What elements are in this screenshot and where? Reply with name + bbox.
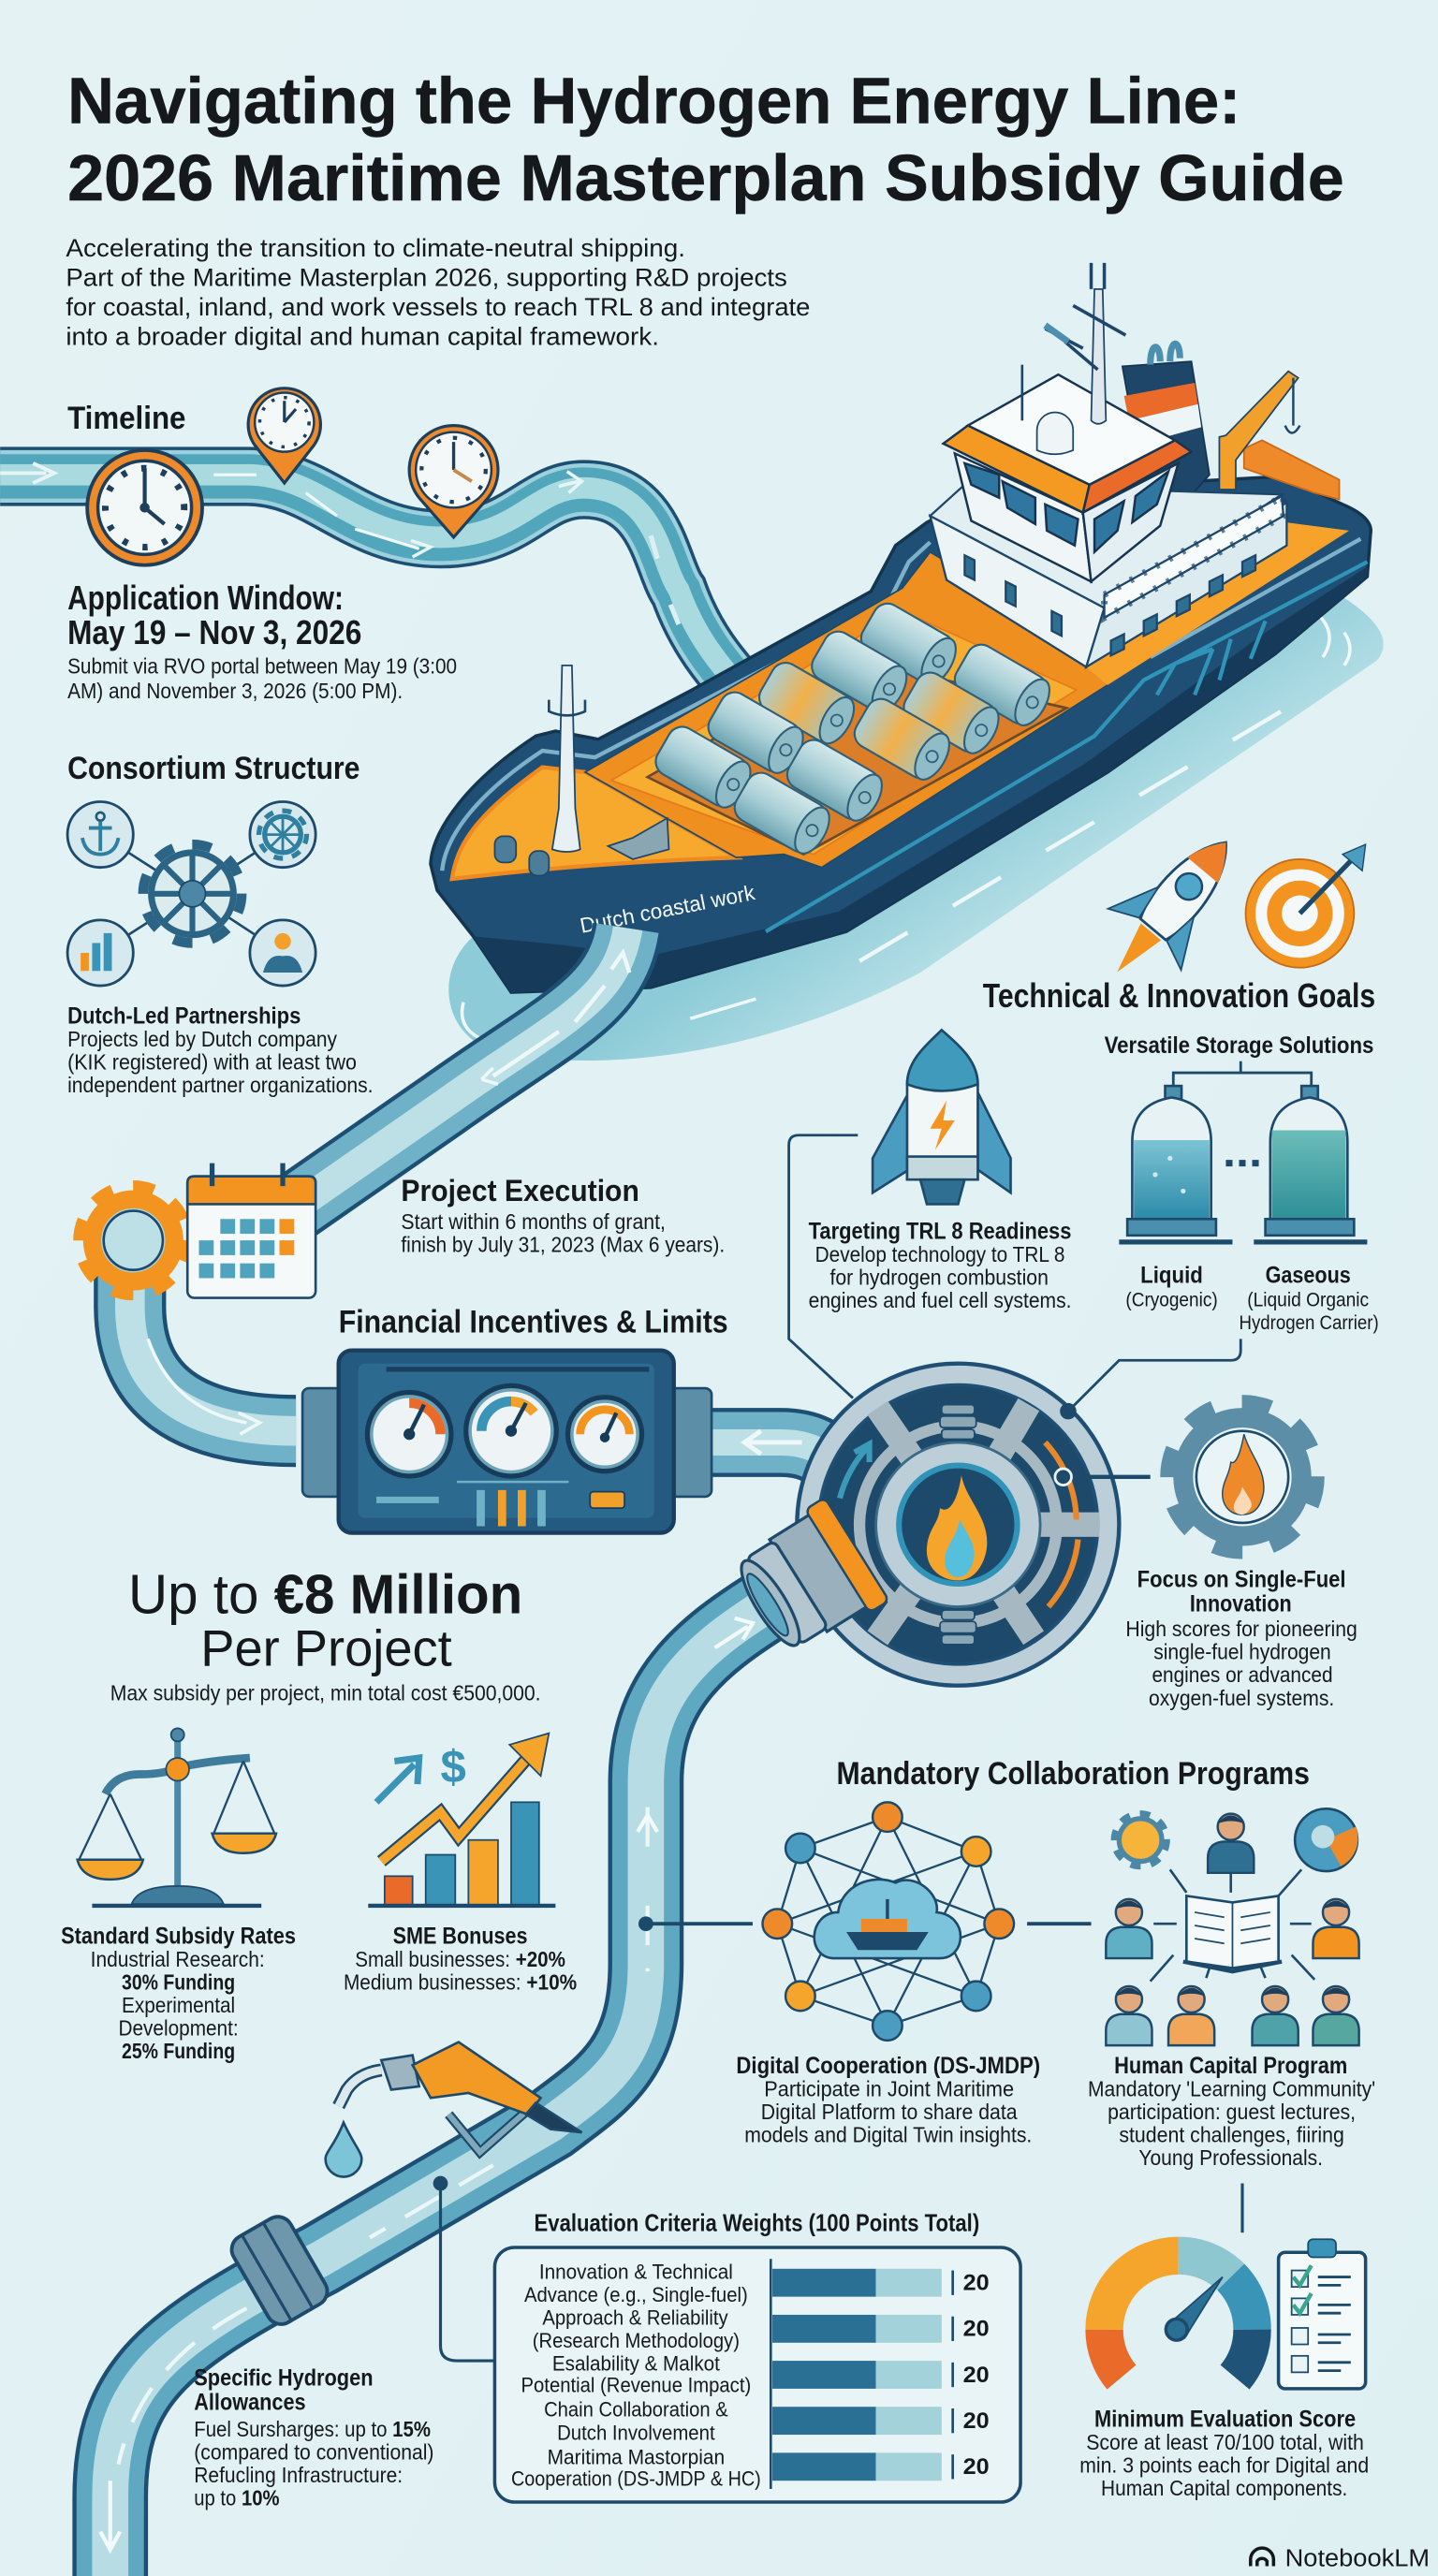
icon: large clock xyxy=(87,450,202,565)
project execution: finish by July 31, 2023 (Max 6 years). xyxy=(401,1232,725,1256)
hull stripes xyxy=(766,562,1367,931)
intro text xyxy=(66,233,810,351)
icon: clock pin two xyxy=(409,426,498,537)
digital network icon xyxy=(763,1802,1014,2041)
storage labels: Hydrogen Carrier) xyxy=(1239,1312,1379,1334)
hull lower band xyxy=(474,567,1367,992)
row 1: Advance (e.g., Single-fuel) xyxy=(524,2283,748,2306)
main deck xyxy=(585,552,1118,868)
row 3: Esalability & Malkot xyxy=(552,2352,720,2376)
icon: rocket small xyxy=(1080,812,1262,1003)
icon: ship wheel xyxy=(143,844,242,943)
icon: small wheel xyxy=(250,801,315,868)
row 2: Approach & Reliability xyxy=(542,2305,728,2329)
leader: pipe to evaluation xyxy=(433,2176,494,2361)
hydrogen allowances text: Fuel Sursharges: up to 15% xyxy=(194,2417,431,2441)
leader: storage to hub xyxy=(1068,1339,1240,1412)
icon: flame gear xyxy=(1170,1405,1314,1549)
max subsidy stat xyxy=(110,1563,541,1705)
row 1 xyxy=(524,2260,990,2306)
project execution: Start within 6 months of grant, xyxy=(401,1209,666,1234)
hull name: Dutch coastal work xyxy=(578,880,757,938)
hub collar xyxy=(726,1498,889,1662)
title: Navigating the Hydrogen Energy Line: xyxy=(67,65,1240,138)
SME text: Small businesses: +20% xyxy=(355,1947,565,1971)
min score text: Human Capital components. xyxy=(1101,2476,1347,2500)
consortium diagram xyxy=(67,801,315,986)
pipe: control box to hub xyxy=(707,1431,838,1471)
mandatory heading: Mandatory Collaboration Programs xyxy=(836,1756,1310,1792)
min score text xyxy=(1079,2407,1369,2500)
max subsidy stat: Up to €8 Million xyxy=(128,1563,522,1626)
partnerships text xyxy=(67,1003,374,1097)
project execution: Project Execution xyxy=(401,1174,639,1208)
TRL text: for hydrogen combustion xyxy=(829,1265,1049,1289)
intro text: into a broader digital and human capital framework. xyxy=(66,322,659,351)
min score text: Score at least 70/100 total, with xyxy=(1086,2430,1364,2454)
storage labels: Gaseous xyxy=(1266,1264,1351,1289)
storage dots xyxy=(1225,1162,1259,1165)
gauge 3 xyxy=(565,1395,644,1473)
icon: anchor xyxy=(67,801,133,868)
intro text: for coastal, inland, and work vessels to reach TRL 8 and integrate xyxy=(66,292,810,321)
icon: checklist clipboard xyxy=(1279,2239,1366,2389)
people group xyxy=(1106,1899,1359,2045)
connector: learning to score xyxy=(1241,2184,1243,2232)
icon: hub flame xyxy=(927,1475,987,1580)
TRL text xyxy=(809,1219,1071,1312)
hub dots xyxy=(1060,1403,1077,1419)
max subsidy stat: Per Project xyxy=(200,1620,452,1677)
intro text: Part of the Maritime Masterplan 2026, supporting R&D projects xyxy=(66,262,787,291)
timeline pipe xyxy=(0,463,764,714)
heading: storage: Versatile Storage Solutions xyxy=(1105,1033,1373,1059)
row 5: Maritima Mastorpian xyxy=(548,2446,725,2469)
subsidy rates text: Standard Subsidy Rates xyxy=(61,1924,296,1949)
digital cooperation text: Participate in Joint Maritime xyxy=(764,2077,1014,2101)
funnel xyxy=(1123,344,1210,522)
TRL text: Develop technology to TRL 8 xyxy=(815,1242,1064,1266)
title: 2026 Maritime Masterplan Subsidy Guide xyxy=(67,141,1344,214)
foremast xyxy=(549,666,585,852)
icon: person suit xyxy=(1208,1814,1254,1873)
single-fuel text: engines or advanced xyxy=(1152,1662,1333,1687)
project execution xyxy=(401,1174,725,1256)
deck rim xyxy=(611,611,1077,855)
human capital text: Human Capital Program xyxy=(1114,2054,1347,2079)
row 4: 20 xyxy=(963,2409,990,2434)
single-fuel text: Innovation xyxy=(1190,1592,1292,1617)
row 4: Dutch Involvement xyxy=(557,2421,715,2444)
icon: target xyxy=(1246,844,1366,968)
storage labels xyxy=(1125,1264,1379,1334)
row 4: Chain Collaboration & xyxy=(544,2398,728,2422)
icon: bars xyxy=(67,920,133,986)
icon: gear xyxy=(82,1190,184,1292)
pipe: ship to gear xyxy=(271,929,629,1224)
cargo tanks xyxy=(651,598,1057,860)
bridge cabin xyxy=(944,374,1192,581)
leader: pipe to network xyxy=(638,1916,753,1931)
subsidy rates text: Development: xyxy=(119,2016,239,2041)
bulwark rim xyxy=(442,539,1360,871)
icon: gaseous tank xyxy=(1254,1086,1367,1242)
hydrogen allowances text: (compared to conventional) xyxy=(194,2439,433,2464)
SME text: SME Bonuses xyxy=(393,1924,528,1949)
main pipe: hub to bottom xyxy=(100,1602,772,2576)
central hub xyxy=(797,1364,1119,1686)
storage labels: Liquid xyxy=(1140,1264,1203,1289)
intro text: Accelerating the transition to climate-neutral shipping. xyxy=(66,233,685,262)
subsidy rates text xyxy=(61,1924,296,2063)
application window text: May 19 – Nov 3, 2026 xyxy=(67,613,361,651)
SME text xyxy=(344,1924,577,1994)
storage labels: (Liquid Organic xyxy=(1247,1289,1369,1310)
single-fuel text: High scores for pioneering xyxy=(1125,1617,1357,1641)
human capital text: student challenges, fiiring xyxy=(1119,2123,1344,2147)
ship hull xyxy=(431,476,1371,992)
notebooklm logo: NotebookLM xyxy=(1285,2543,1430,2571)
score gauge xyxy=(1105,2256,1253,2378)
water wake xyxy=(448,594,1384,1061)
icon: droplet xyxy=(326,2123,361,2177)
deck fittings xyxy=(494,818,668,875)
application window text: Submit via RVO portal between May 19 (3:00 xyxy=(67,654,457,679)
digital cooperation text xyxy=(736,2054,1040,2147)
TRL text: engines and fuel cell systems. xyxy=(809,1288,1071,1312)
subsidy rates text: Industrial Research: xyxy=(91,1947,265,1971)
leader: TRL to hub xyxy=(789,1135,858,1398)
digital cooperation text: models and Digital Twin insights. xyxy=(744,2123,1032,2147)
row 3 xyxy=(521,2352,990,2396)
icon: calendar xyxy=(187,1164,315,1298)
row 3: 20 xyxy=(963,2364,990,2388)
hydrogen allowances text: Specific Hydrogen xyxy=(194,2365,374,2391)
hydrogen allowances text xyxy=(194,2365,433,2510)
single-fuel text: oxygen-fuel systems. xyxy=(1149,1686,1334,1710)
TRL text: Targeting TRL 8 Readiness xyxy=(809,1219,1071,1244)
partnerships text: independent partner organizations. xyxy=(67,1073,374,1097)
icon: liquid tank xyxy=(1119,1086,1232,1242)
foredeck xyxy=(452,768,736,879)
hub bolts xyxy=(940,1405,976,1645)
pipe: gear to control box xyxy=(130,1265,296,1434)
row 5: Cooperation (DS-JMDP & HC) xyxy=(511,2466,761,2490)
icon: growth chart: $ xyxy=(441,1742,466,1793)
application window text: AM) and November 3, 2026 (5:00 PM). xyxy=(67,679,403,703)
icon: rocket TRL xyxy=(873,1030,1011,1204)
partnerships text: (KIK registered) with at least two xyxy=(67,1050,357,1075)
icon: open book xyxy=(1183,1895,1282,1971)
icon: gear sun xyxy=(1116,1815,1166,1865)
control box xyxy=(302,1351,712,1533)
row 2: 20 xyxy=(963,2318,990,2342)
storage labels: (Cryogenic) xyxy=(1125,1289,1218,1310)
row 5 xyxy=(511,2446,990,2490)
row 2: (Research Methodology) xyxy=(533,2329,740,2352)
heading: technical goals: Technical & Innovation Goals xyxy=(983,976,1375,1015)
digital cooperation text: Digital Platform to share data xyxy=(761,2100,1018,2124)
partnerships text: Projects led by Dutch company xyxy=(67,1027,337,1051)
min score text: min. 3 points each for Digital and xyxy=(1079,2452,1369,2477)
row 4 xyxy=(544,2398,990,2444)
row 1: 20 xyxy=(963,2272,990,2296)
icon: pie xyxy=(1295,1808,1358,1871)
leader: hub to flame gear xyxy=(1055,1469,1151,1486)
cargo hold xyxy=(648,659,1066,855)
subsidy rates text: Experimental xyxy=(122,1993,235,2017)
SME text: Medium businesses: +10% xyxy=(344,1969,577,1994)
heading: timeline: Timeline xyxy=(67,401,185,436)
storage connector xyxy=(1173,1061,1312,1090)
stern box and crane xyxy=(1219,372,1340,500)
row 2 xyxy=(533,2305,990,2352)
icon: people xyxy=(250,920,315,986)
mast and dome xyxy=(1022,263,1125,454)
human capital text xyxy=(1088,2054,1375,2170)
subsidy rates text: 30% Funding xyxy=(122,1969,235,1994)
application window text xyxy=(67,578,457,703)
title xyxy=(67,65,1344,214)
row 3: Potential (Revenue Impact) xyxy=(521,2373,751,2396)
icon: clock pin one xyxy=(248,388,320,483)
pipe coupling xyxy=(227,2211,332,2330)
row 1: Innovation & Technical xyxy=(539,2260,733,2283)
digital cooperation text: Digital Cooperation (DS-JMDP) xyxy=(736,2054,1040,2079)
single-fuel text xyxy=(1125,1567,1357,1710)
icon: balance scale xyxy=(78,1728,276,1906)
subsidy rates text: 25% Funding xyxy=(122,2039,235,2063)
ship xyxy=(431,263,1371,992)
application window text: Application Window: xyxy=(67,578,344,617)
learning community icon xyxy=(1106,1808,1359,2045)
hydrogen allowances text: up to 10% xyxy=(194,2486,280,2510)
lower superstructure xyxy=(931,485,1286,667)
human capital text: Young Professionals. xyxy=(1138,2145,1323,2170)
single-fuel text: single-fuel hydrogen xyxy=(1153,1640,1331,1664)
min score text: Minimum Evaluation Score xyxy=(1094,2407,1356,2432)
hydrogen allowances text: Allowances xyxy=(194,2391,306,2416)
evaluation panel xyxy=(494,2247,1020,2502)
human capital text: participation: guest lectures, xyxy=(1108,2100,1356,2124)
row 5: 20 xyxy=(963,2455,990,2480)
max subsidy stat: Max subsidy per project, min total cost €500,000. xyxy=(110,1681,541,1705)
stern deck xyxy=(1086,522,1349,685)
consortium heading: Consortium Structure xyxy=(67,751,360,786)
human capital text: Mandatory 'Learning Community' xyxy=(1088,2077,1375,2101)
gauge 1 xyxy=(365,1390,454,1479)
partnerships text: Dutch-Led Partnerships xyxy=(67,1003,301,1029)
icon: growth chart xyxy=(368,1734,555,1906)
icon: fuel nozzle xyxy=(339,2042,581,2152)
hydrogen allowances text: Refucling Infrastructure: xyxy=(194,2463,403,2487)
evaluation heading: Evaluation Criteria Weights (100 Points Total) xyxy=(535,2210,979,2236)
gauge 2 xyxy=(463,1383,559,1479)
connector: network to learning xyxy=(1027,1923,1092,1925)
heading: financial: Financial Incentives & Limits xyxy=(339,1304,728,1339)
single-fuel text: Focus on Single-Fuel xyxy=(1137,1567,1346,1592)
icon: cloud ship xyxy=(814,1880,961,1958)
